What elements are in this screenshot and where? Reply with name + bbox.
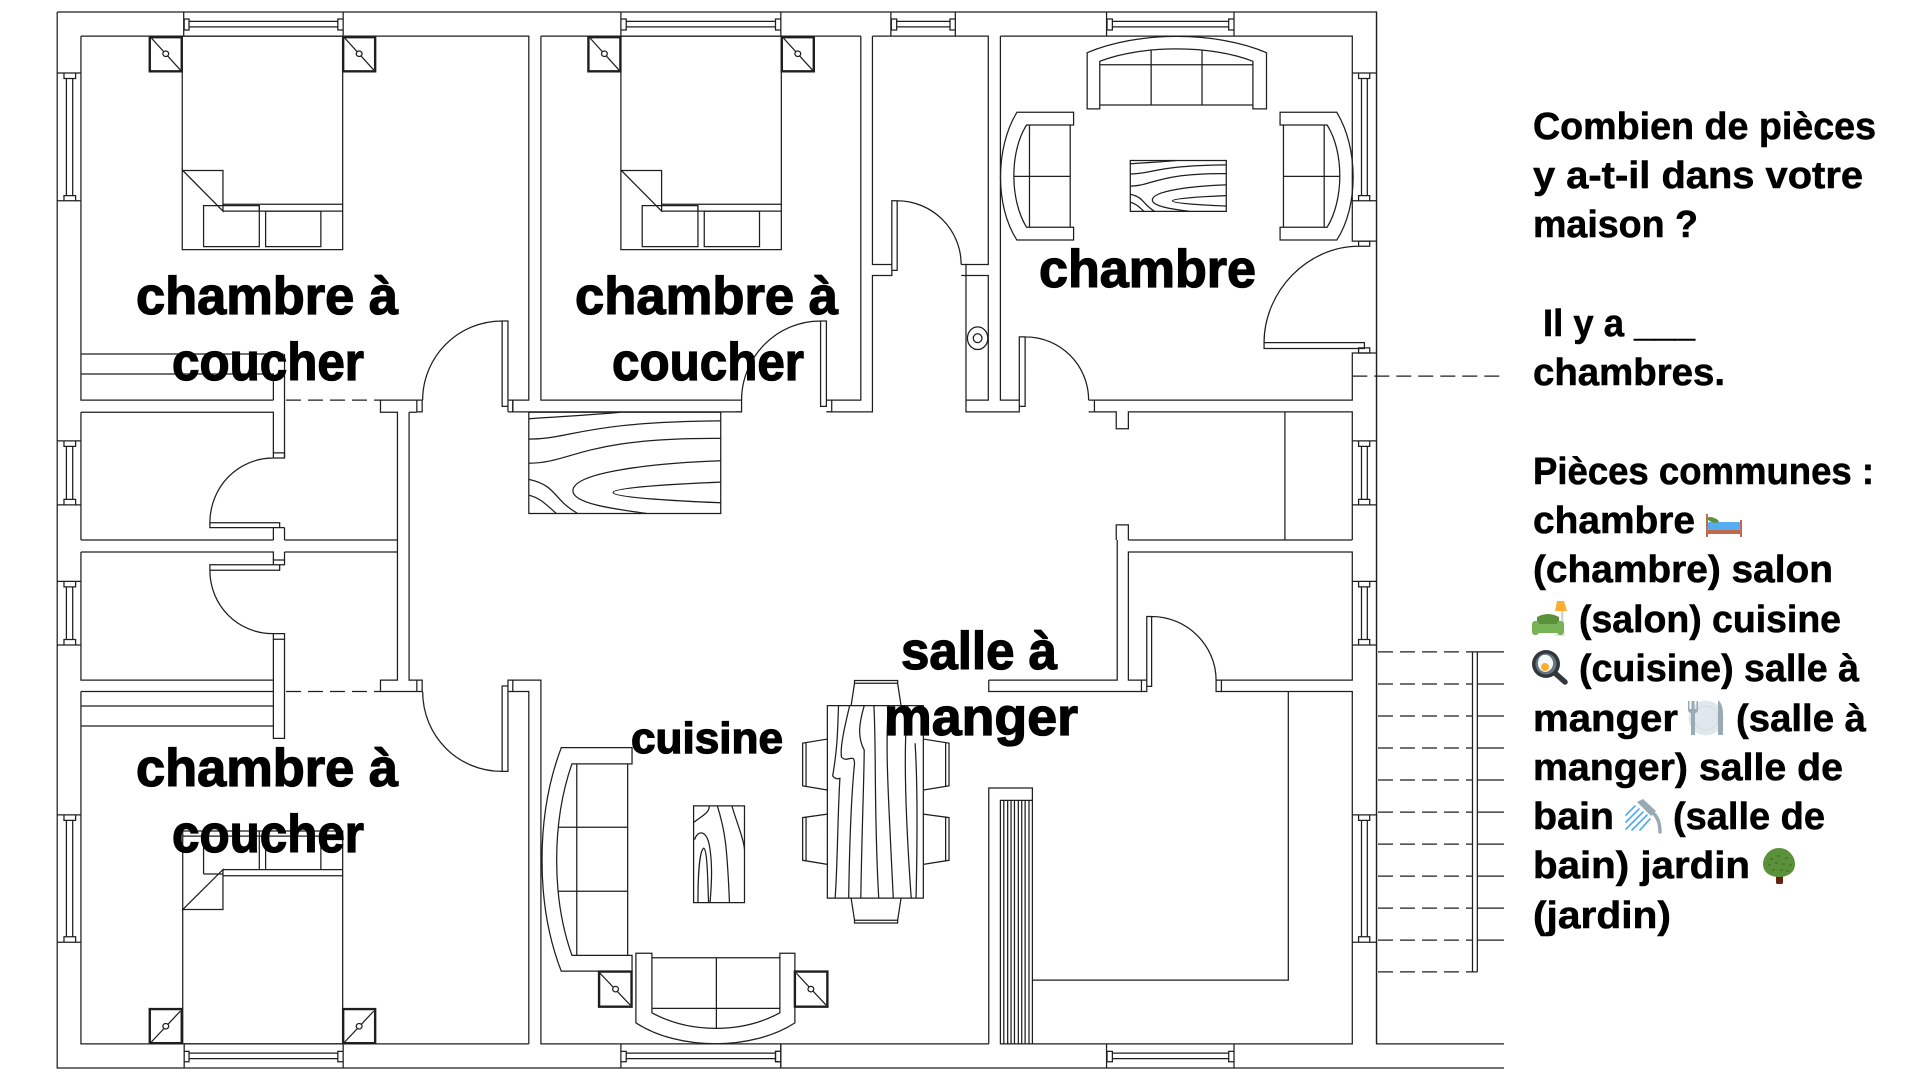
bottom-left quadrant: bedroom and living area <box>57 540 989 1068</box>
dashed line lower corridor <box>286 691 380 693</box>
left windows <box>57 73 81 505</box>
walls bottom-left <box>81 540 989 1044</box>
common rooms list: (chambre) salon <box>1533 549 1833 591</box>
answer sentence: Il y a ___ <box>1543 303 1696 345</box>
left sofa <box>542 748 632 971</box>
top-left quadrant: bedrooms and closets <box>57 12 861 540</box>
doors top-right <box>742 201 1370 412</box>
small table <box>694 806 744 903</box>
bed two <box>621 36 781 250</box>
label: bedroom two: chambre à <box>575 267 839 326</box>
bed one <box>182 36 343 250</box>
nightstand six <box>343 1009 375 1043</box>
label: bedroom three <box>136 739 399 864</box>
common rooms list: (jardin) <box>1533 895 1671 937</box>
terrace steps <box>1378 652 1472 972</box>
question <box>1533 106 1876 246</box>
dining chairs <box>803 681 949 923</box>
label: chambre: chambre <box>1039 240 1256 299</box>
side text panel <box>1533 106 1876 937</box>
common rooms list: manger) salle de <box>1533 747 1843 789</box>
answer sentence <box>1533 303 1725 394</box>
bed three <box>183 831 343 1044</box>
coffee table <box>1130 160 1226 211</box>
bottom-right quadrant: dining room and terrace <box>776 540 1504 1068</box>
dashed line upper corridor <box>286 399 380 401</box>
common rooms heading: Pièces communes : <box>1533 451 1874 493</box>
label: bedroom one: coucher <box>172 333 364 392</box>
hall table <box>529 412 721 513</box>
terrace stair rail <box>1472 652 1504 972</box>
bedroom walls top-left <box>81 36 861 540</box>
nightstand five <box>150 1009 182 1043</box>
top windows <box>184 12 776 36</box>
icon: bed <box>1706 514 1742 537</box>
sofa top <box>1087 36 1266 109</box>
label: bedroom one: chambre à <box>136 267 399 326</box>
bottom windows <box>184 1044 781 1068</box>
outer walls <box>57 12 1504 1068</box>
right windows lower <box>1352 581 1377 942</box>
label: salle à manger: salle à <box>901 622 1057 681</box>
common rooms list: (salle de <box>1673 796 1825 838</box>
common rooms list: (salon) cuisine <box>1579 599 1841 641</box>
common rooms list: bain <box>1533 796 1614 838</box>
left windows lower <box>57 581 81 942</box>
icon: shower <box>1626 799 1660 832</box>
nightstand one <box>150 37 182 71</box>
nightstand three <box>588 37 620 71</box>
nightstand seven <box>599 972 632 1007</box>
icon: couch and lamp <box>1532 601 1567 636</box>
right windows <box>1352 73 1377 505</box>
label: bedroom three: chambre à <box>136 739 399 798</box>
door bottom-right <box>1141 616 1221 692</box>
common rooms list: manger <box>1533 698 1678 740</box>
wall fixture <box>967 327 988 350</box>
nightstand eight <box>795 972 827 1007</box>
common rooms list: bain) jardin <box>1533 845 1750 887</box>
sofa right <box>1280 112 1353 240</box>
bottom sofa <box>636 953 795 1044</box>
label: salle à manger <box>884 622 1078 747</box>
sofa left <box>1001 112 1074 240</box>
icon: plate and cutlery <box>1688 700 1724 736</box>
label: salle à manger: manger <box>884 688 1078 747</box>
floor plan <box>57 12 1504 1068</box>
label: cuisine: cuisine <box>631 714 783 763</box>
common rooms list: chambre <box>1533 500 1695 542</box>
dashed line right wall <box>1352 375 1502 377</box>
icon: tree <box>1763 848 1795 884</box>
top windows right <box>776 12 1234 36</box>
bottom windows right <box>776 1044 1234 1068</box>
doors top-left <box>210 321 742 528</box>
dining table <box>827 706 923 898</box>
room labels <box>136 240 1256 864</box>
label: bedroom three: coucher <box>172 805 364 864</box>
answer sentence: chambres. <box>1533 352 1725 394</box>
top-right quadrant: main room <box>742 12 1502 540</box>
common rooms list: (cuisine) salle à <box>1579 648 1860 690</box>
ramp lines <box>1004 800 1029 1044</box>
common rooms list: (salle à <box>1736 698 1867 740</box>
nightstand two <box>343 37 375 71</box>
question: Combien de pièces <box>1533 106 1876 148</box>
doors bottom-left <box>210 560 513 771</box>
label: bedroom two <box>575 267 839 392</box>
walls bottom-right <box>989 540 1377 1044</box>
walls top-right <box>826 12 1377 540</box>
label: bedroom two: coucher <box>612 333 804 392</box>
label: bedroom one <box>136 267 399 392</box>
icon: frying pan <box>1532 650 1565 682</box>
question: maison ? <box>1533 204 1698 246</box>
common rooms list <box>1533 500 1867 937</box>
nightstand four <box>782 37 814 71</box>
question: y a-t-il dans votre <box>1533 155 1863 197</box>
